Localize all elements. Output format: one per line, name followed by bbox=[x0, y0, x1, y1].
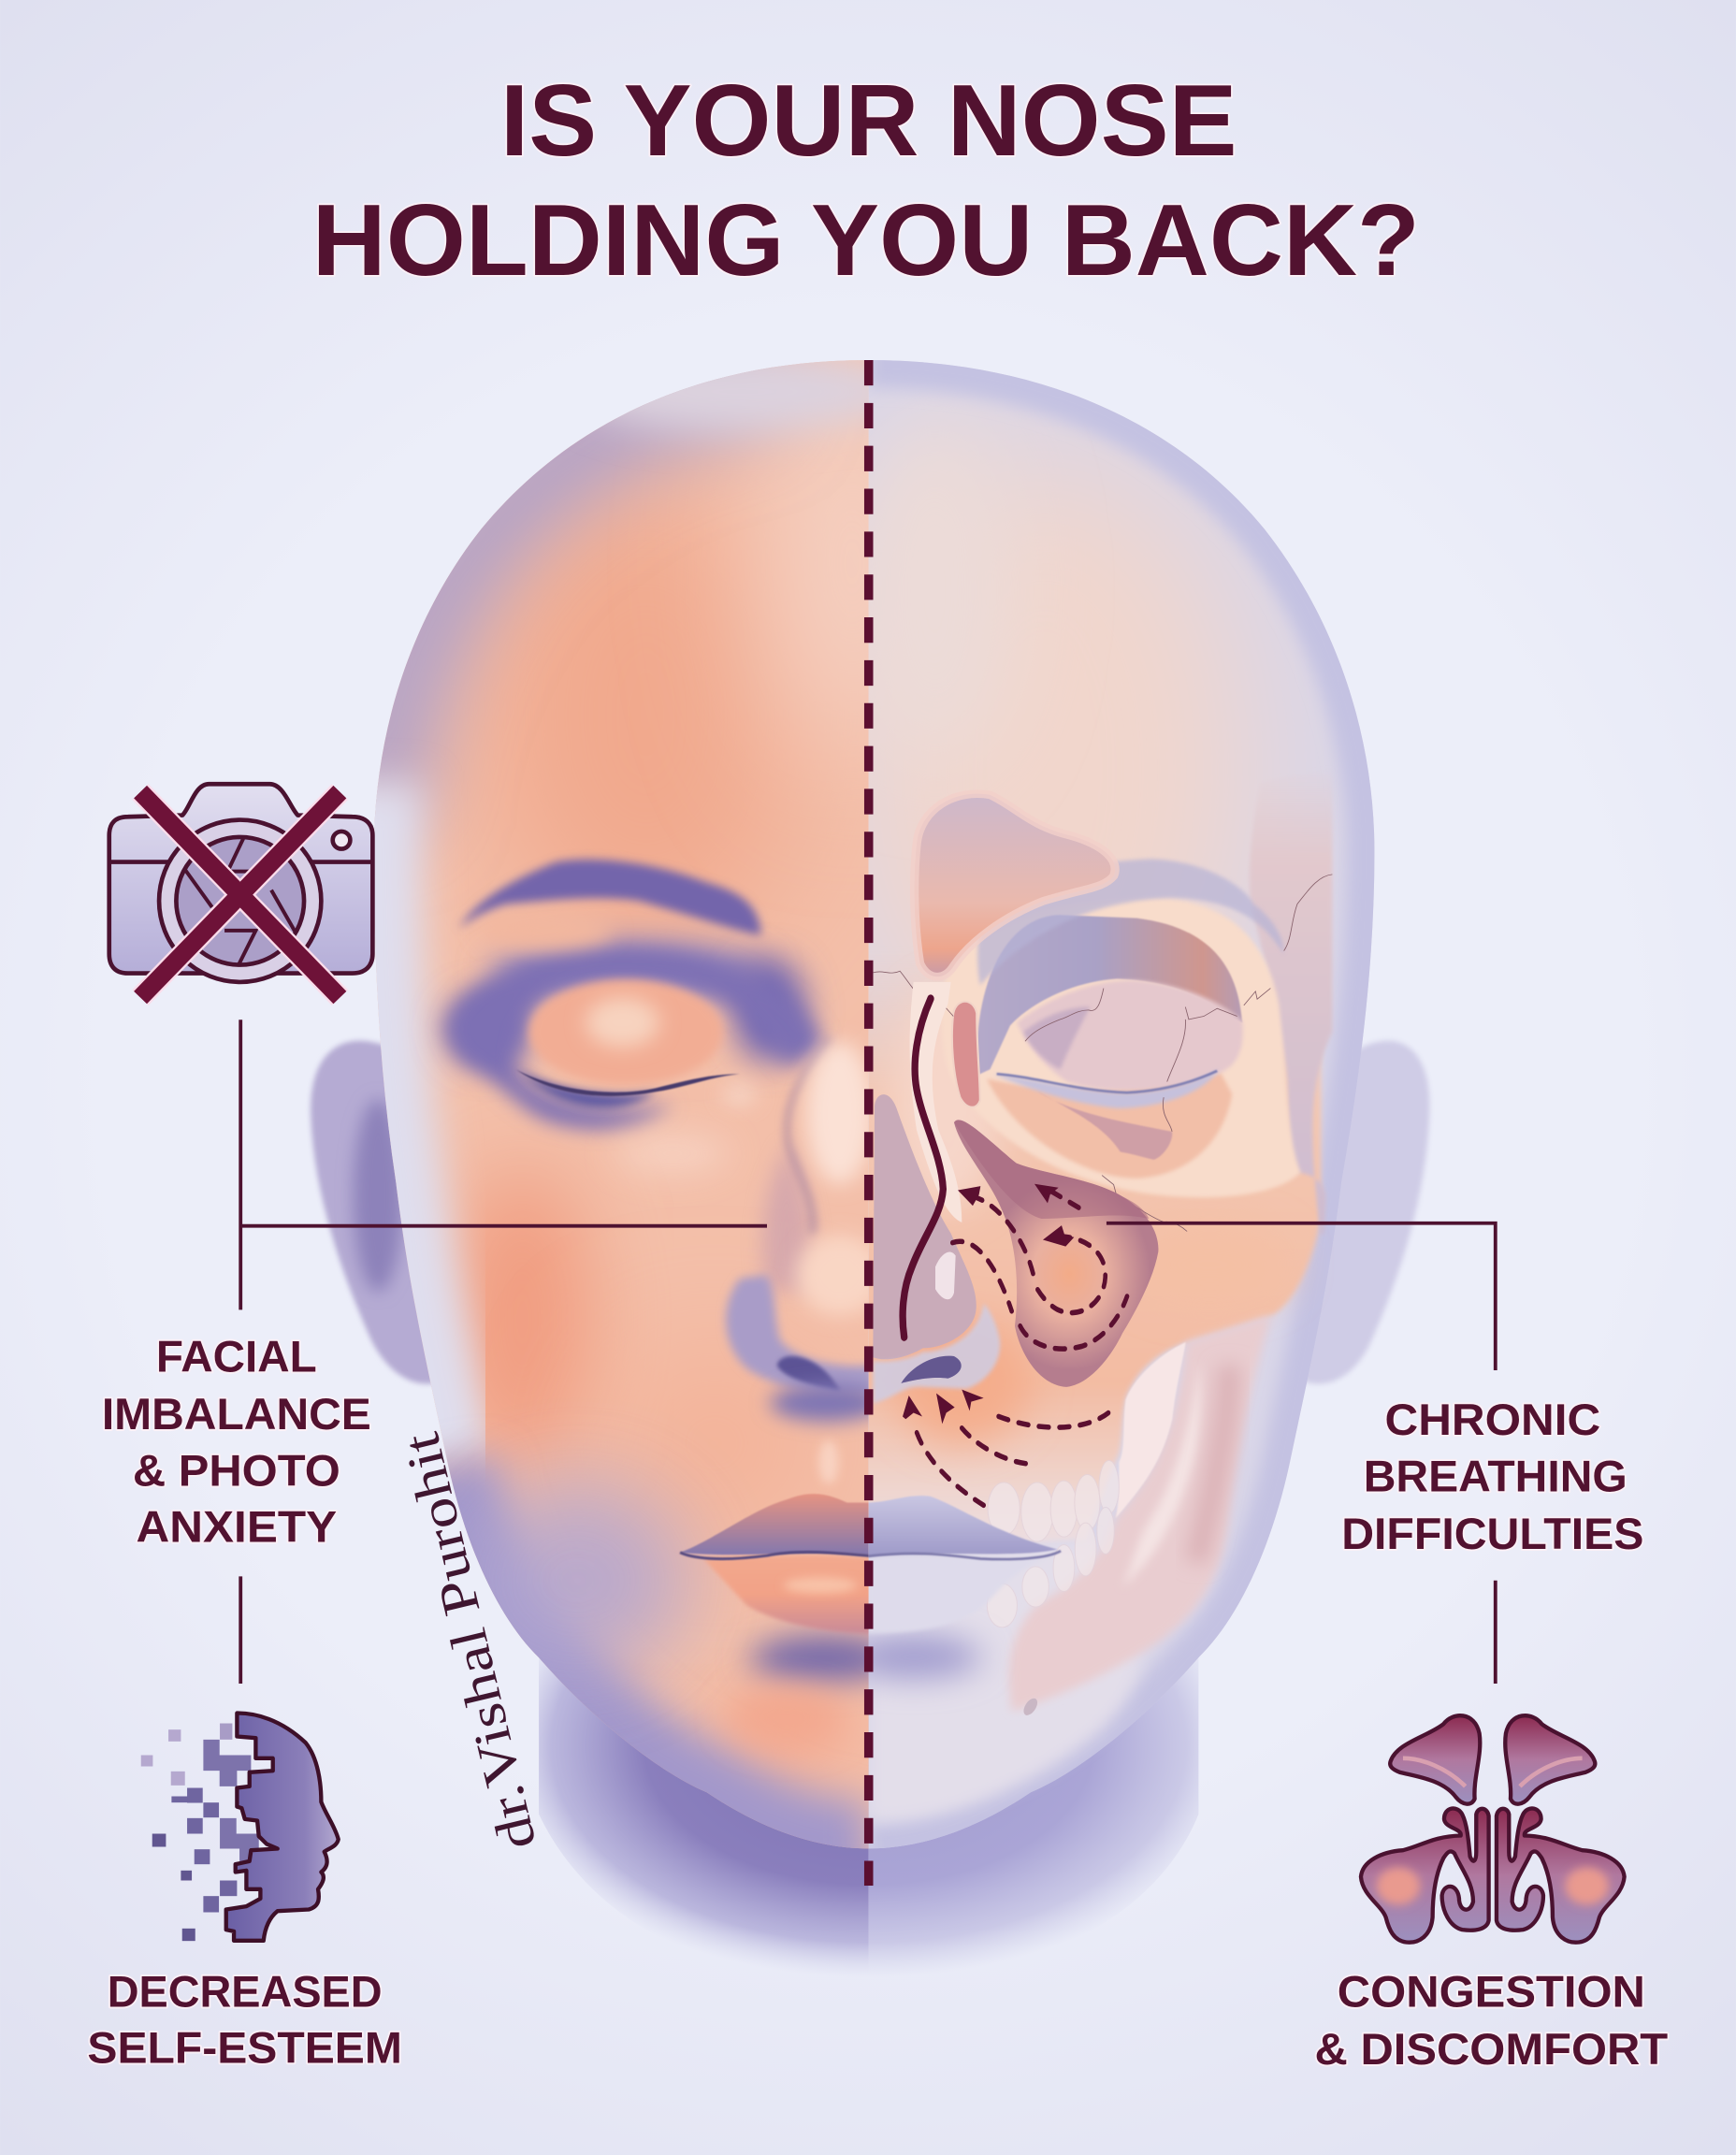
label: congestion and discomfort bbox=[1315, 1966, 1668, 2074]
mouth line bbox=[867, 1551, 1061, 1559]
mandible bbox=[1009, 1316, 1271, 1712]
label: chronic breathing difficulties bbox=[1341, 1395, 1643, 1558]
center dashed divider bbox=[865, 360, 872, 1886]
upper lip bbox=[680, 1494, 874, 1555]
closed eye line bbox=[997, 1071, 1217, 1092]
chin highlight bbox=[731, 1689, 844, 1745]
mouth line bbox=[680, 1552, 874, 1559]
temple pale band bbox=[374, 784, 448, 1465]
upper lid crease highlight bbox=[503, 924, 615, 962]
orbit side shade bbox=[1023, 1007, 1091, 1069]
label: facial imbalance bbox=[102, 1331, 371, 1552]
upper orbit cavity bbox=[976, 915, 1242, 1076]
teeth bbox=[987, 1461, 1119, 1627]
chin area bbox=[869, 1540, 1140, 1821]
under lip shade bbox=[847, 1635, 980, 1679]
eyelid bbox=[529, 979, 723, 1085]
orbit floor bbox=[987, 1073, 1232, 1179]
lacrimal bone bbox=[952, 1002, 980, 1107]
right connector line bbox=[1107, 1223, 1496, 1684]
philtrum highlight bbox=[818, 1440, 839, 1484]
under-eye bbox=[519, 1069, 656, 1108]
under lip shade bbox=[750, 1635, 897, 1682]
label: facial imbalance: ANXIETY bbox=[137, 1502, 337, 1552]
lower lid band bbox=[993, 1069, 1219, 1108]
lower lip bbox=[703, 1555, 874, 1633]
brow ridge band bbox=[977, 859, 1284, 985]
title: HOLDING YOU BACK? bbox=[312, 184, 1420, 297]
face illustration bbox=[311, 351, 1429, 1986]
label: chronic breathing difficulties: DIFFICULTIES bbox=[1341, 1509, 1643, 1558]
icon: pixelated head bbox=[141, 1714, 339, 1941]
inner turbinate bbox=[935, 1252, 956, 1299]
lower lip bbox=[867, 1557, 1048, 1633]
neck bbox=[539, 1636, 1198, 1986]
eye socket shade bbox=[445, 942, 823, 1129]
under nose shade bbox=[771, 1384, 884, 1422]
left ear bbox=[311, 1041, 454, 1384]
right lips bbox=[847, 1496, 1061, 1679]
nose side crease bbox=[788, 1038, 830, 1235]
nose tip rim bbox=[873, 1304, 1000, 1404]
mandibular notch bbox=[1116, 1342, 1186, 1518]
frontal sinus bbox=[915, 794, 1115, 976]
mental foramen bbox=[1020, 1696, 1040, 1717]
title bbox=[312, 65, 1420, 297]
crown pale shade bbox=[600, 360, 868, 449]
label: chronic breathing difficulties: BREATHING bbox=[1364, 1451, 1628, 1500]
highlight under eye bbox=[615, 1132, 730, 1176]
temporal bone band bbox=[1250, 767, 1332, 1235]
nose tip bbox=[796, 1235, 883, 1315]
nose side shade bbox=[762, 1141, 813, 1291]
label: facial imbalance: FACIAL bbox=[156, 1331, 317, 1381]
cranium edge shade bbox=[374, 374, 770, 825]
dashed airflow paths bbox=[915, 1191, 1127, 1505]
arrowheads bbox=[903, 1184, 1074, 1424]
label: decreased self-esteem: SELF-ESTEEM bbox=[87, 2023, 402, 2073]
label: chronic breathing difficulties: CHRONIC bbox=[1384, 1395, 1600, 1444]
maxilla and cheek bone bbox=[859, 948, 1321, 1553]
left connector line bbox=[240, 1020, 767, 1684]
bone sutures bbox=[874, 875, 1332, 1232]
right half: transparent head and skull bbox=[838, 360, 1374, 1848]
sinus cavity bbox=[954, 1120, 1158, 1387]
upper lip bbox=[867, 1496, 1057, 1557]
nostril bbox=[777, 1356, 840, 1391]
icon: sinuses bbox=[1361, 1715, 1625, 1943]
nasal anatomy and airflow arrows bbox=[873, 982, 1158, 1505]
label: decreased self-esteem bbox=[87, 1966, 402, 2073]
left half: skin bbox=[374, 360, 869, 1848]
label: decreased self-esteem: DECREASED bbox=[108, 1966, 383, 2016]
label: congestion and discomfort: CONGESTION bbox=[1338, 1966, 1645, 2016]
closed eye lash line bbox=[515, 1069, 740, 1096]
eyebrow bbox=[459, 860, 761, 935]
skull orbit and frontal sinus bbox=[874, 767, 1332, 1235]
orbital rim bbox=[941, 898, 1300, 1197]
watermark: dr.Vishal Purohit bbox=[392, 1426, 548, 1855]
nasal bones bbox=[910, 982, 962, 1222]
right ear bbox=[1292, 1041, 1429, 1384]
jaw and teeth bbox=[987, 1316, 1271, 1717]
icon: crossed-out camera bbox=[109, 784, 372, 998]
nasal wall bbox=[873, 1094, 976, 1359]
left eye and brow bbox=[445, 860, 883, 1315]
nose bridge bbox=[806, 1041, 873, 1185]
label: congestion and discomfort: & DISCOMFORT bbox=[1315, 2024, 1668, 2074]
label: facial imbalance: & PHOTO bbox=[133, 1445, 340, 1495]
label: facial imbalance: IMBALANCE bbox=[102, 1389, 371, 1439]
posterior orbit bbox=[1017, 980, 1243, 1091]
left nose and mouth bbox=[680, 1275, 897, 1745]
septum line bbox=[903, 999, 943, 1337]
orbital fissure bbox=[1036, 1092, 1172, 1160]
title: IS YOUR NOSE bbox=[500, 65, 1237, 178]
nostril bbox=[901, 1356, 962, 1383]
lower jaw shade bbox=[448, 1465, 869, 1848]
nose ala bbox=[726, 1275, 874, 1395]
